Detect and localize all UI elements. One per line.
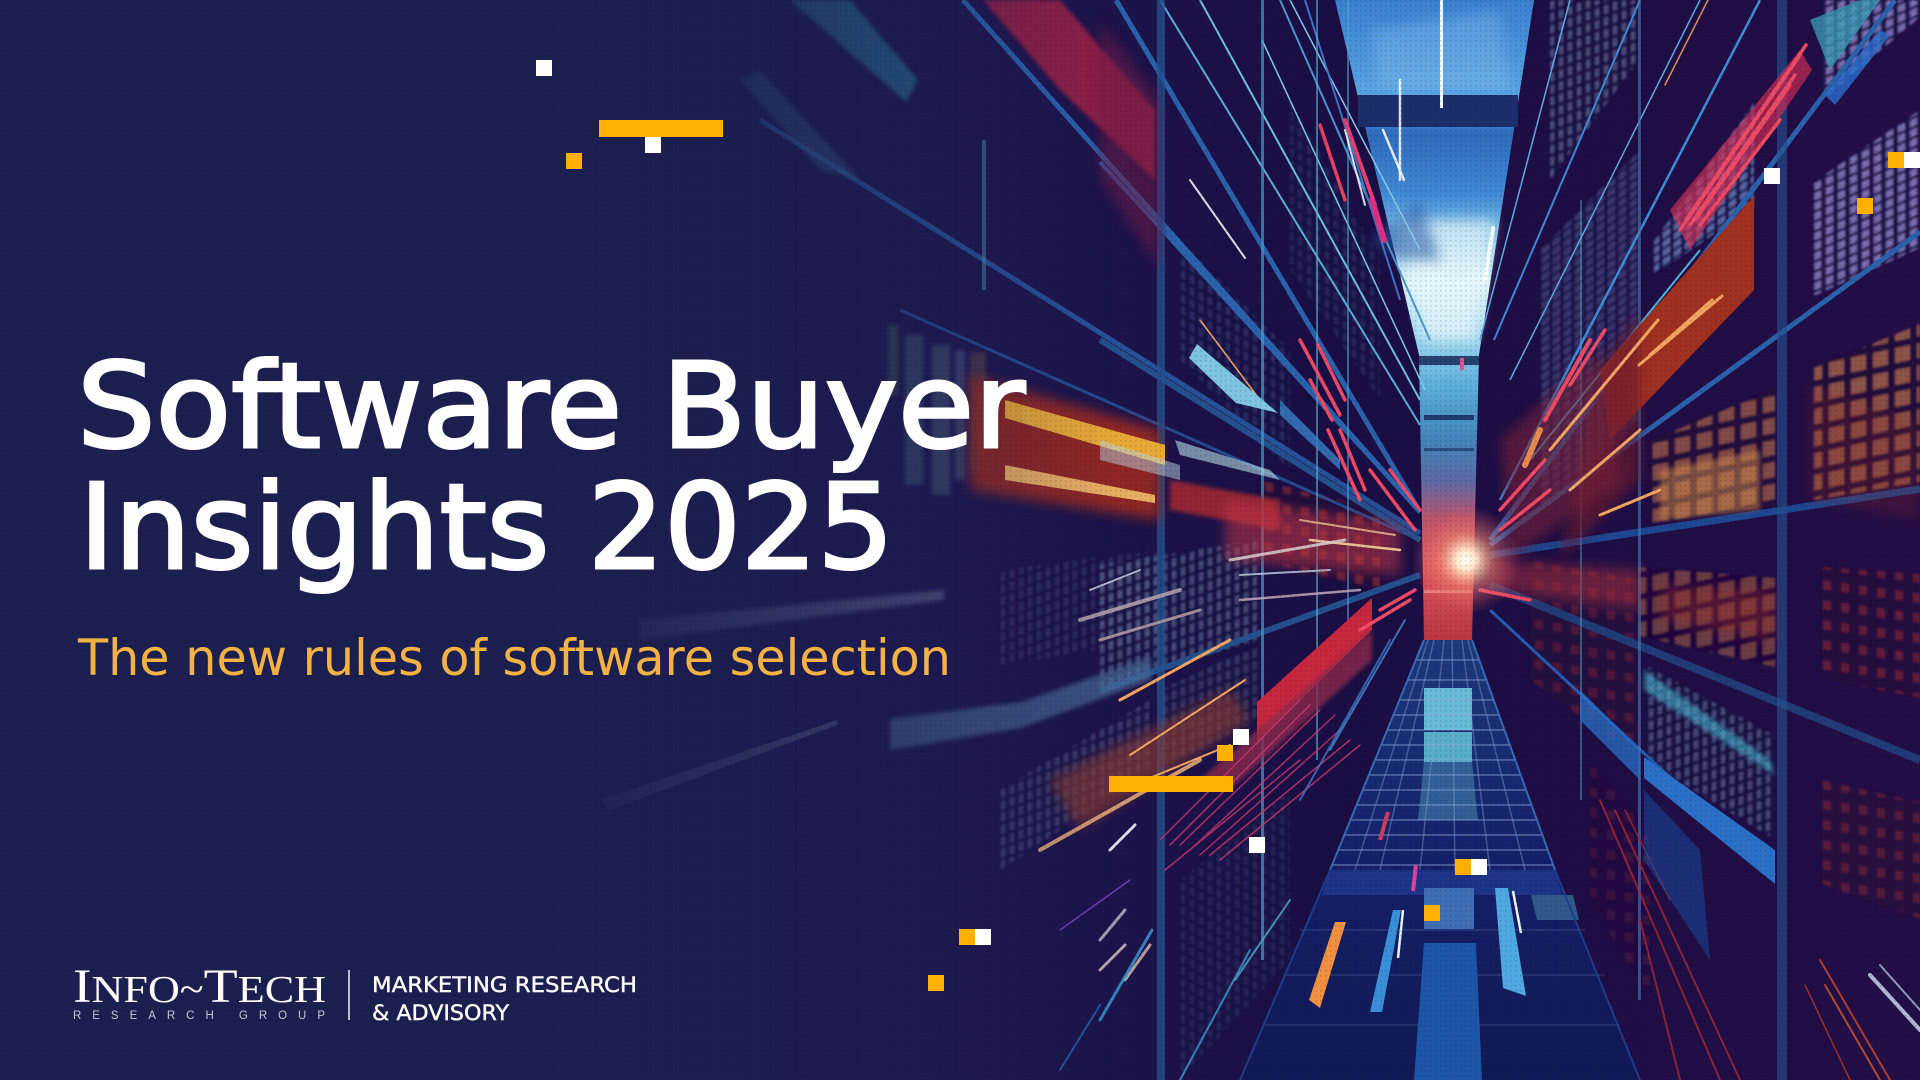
division name [372,973,637,1025]
title [77,337,1026,596]
logo: Info-Tech Research Group: RESEARCH GROUP [73,1010,325,1022]
neon line streaks [1040,0,1920,1080]
left wall shelf beams [760,0,1430,691]
vanishing point glow [1411,505,1521,615]
red and orange light streaks [970,0,1920,830]
vertical frame pillars [982,0,1787,1080]
accent blocks: floor [1424,859,1487,921]
title: Insights 2025 [79,458,894,596]
accent blocks: bottom [928,929,991,991]
logo divider [348,970,350,1020]
floor [1240,640,1640,1080]
title: Software Buyer [77,337,1026,475]
subtitle: The new rules of software selection [77,629,951,687]
logo: Info-Tech Research Group: INFO~ TECH [73,960,326,1013]
central corridor with sky [1335,0,1534,640]
faded coloured server bars [888,325,986,495]
right wall shelf beams [1480,0,1920,875]
cyan and blue wall bands [600,0,1890,960]
window panels on walls [1000,0,1920,1080]
division name: MARKETING RESEARCH [372,973,637,997]
division name: & ADVISORY [372,1001,509,1025]
accent blocks: top right [1764,152,1920,214]
accent blocks: centre [1109,729,1265,853]
accent blocks: top left [536,60,723,169]
